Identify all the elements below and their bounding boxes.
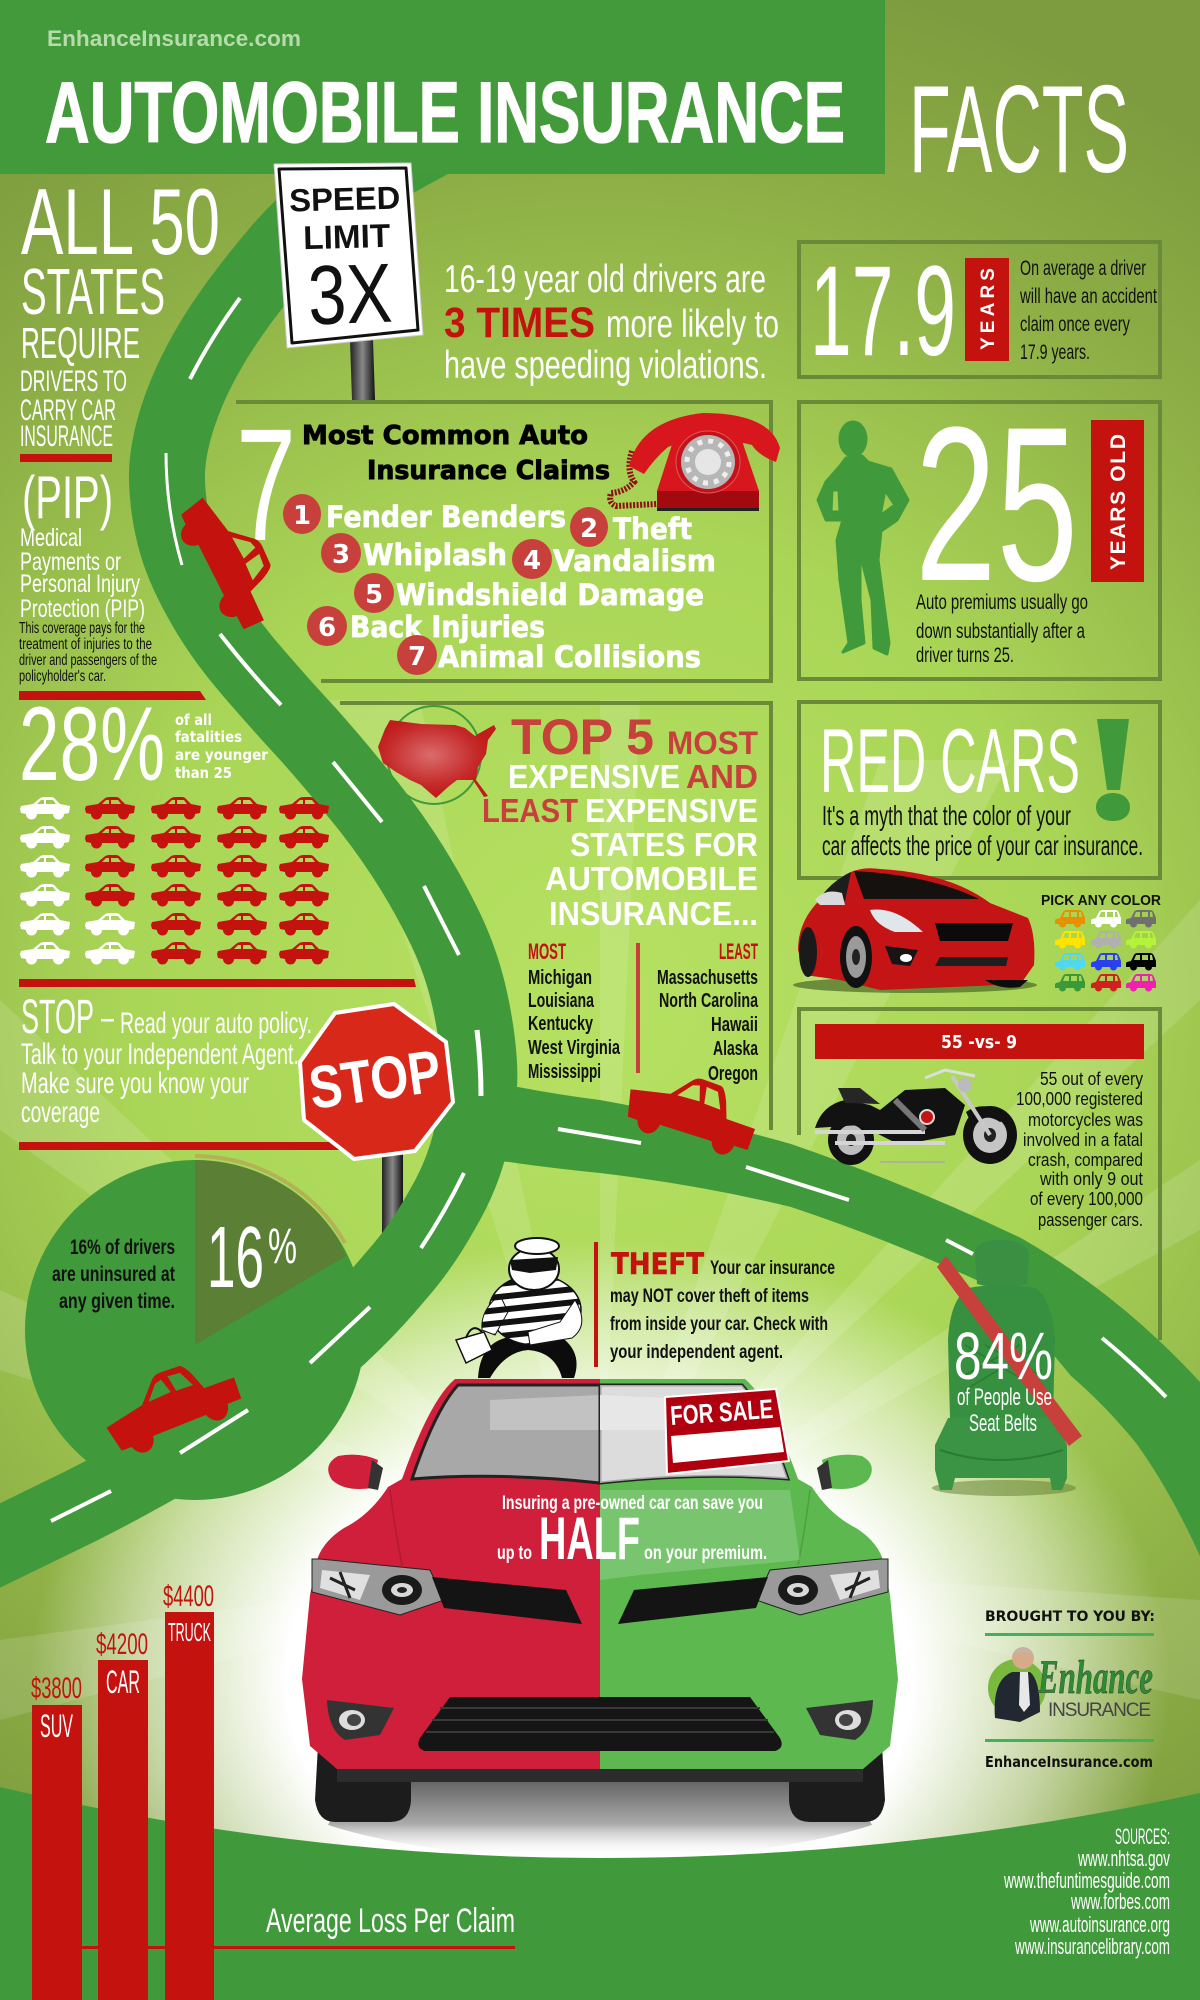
windshield highlight xyxy=(600,1385,788,1483)
logo: enhance insurance: INSURANCE xyxy=(1048,1700,1151,1721)
road: branch xyxy=(480,1087,1200,1556)
panel: stop read your policy: coverage xyxy=(21,1096,100,1129)
panel: PIP: driver and passengers of the xyxy=(19,652,157,669)
panel: 25 years old: down substantially after a xyxy=(916,620,1085,643)
panel: top 5 states: EXPENSIVE xyxy=(585,792,758,829)
panel: 7 most common claims: 7 xyxy=(236,395,296,574)
panel: stop read your policy: Talk to your Independent Agent. xyxy=(21,1038,299,1071)
claim 3 xyxy=(321,533,507,573)
divider bar xyxy=(19,979,416,987)
divider bar xyxy=(19,1142,344,1150)
claim 1: 1 xyxy=(293,501,311,531)
panel: 28 percent fatalities: of all xyxy=(175,711,212,729)
panel: PIP: This coverage pays for the xyxy=(19,620,145,637)
panel: 55 vs 9: involved in a fatal xyxy=(1023,1130,1143,1150)
panel: 55 vs 9: 55 -vs- 9 xyxy=(941,1032,1017,1053)
list: most expensive: Louisiana xyxy=(528,990,595,1012)
panel: theft text xyxy=(610,1247,835,1363)
panel: PIP: Personal Injury xyxy=(20,570,140,598)
pre-owned car text xyxy=(497,1493,767,1572)
icon: speed limit sign: SPEED xyxy=(289,180,401,218)
panel: 55 vs 9: with only 9 out xyxy=(1039,1169,1143,1189)
bar: truck: TRUCK xyxy=(168,1617,211,1647)
big car: left red half xyxy=(302,1379,600,1822)
claim 6: 6 xyxy=(318,613,336,643)
panel: 17.9 years: 17.9 years. xyxy=(1020,341,1090,364)
icon: exclamation mark xyxy=(1096,719,1130,821)
header band xyxy=(0,0,885,174)
panel: 25 years old: Auto premiums usually go xyxy=(916,591,1088,614)
bar: suv xyxy=(31,1672,82,2000)
icon: person silhouette xyxy=(818,422,908,654)
sources xyxy=(1003,1824,1170,1959)
list: least expensive: Hawaii xyxy=(711,1014,758,1036)
speeding text: 3 TIMES xyxy=(444,299,595,347)
speeding text: more likely to xyxy=(606,303,779,346)
claim 5: 5 xyxy=(365,580,383,610)
icon: speed limit sign post xyxy=(350,340,375,400)
panel: all 50 states: STATES xyxy=(21,255,165,328)
panel: 7 most common claims: Most Common Auto xyxy=(302,421,588,451)
panel: PIP: Medical xyxy=(20,524,82,552)
claim 7: 7 xyxy=(408,642,426,672)
panel: PIP: Payments or xyxy=(20,548,121,576)
bar: car xyxy=(96,1628,148,2000)
panel: brought to you by xyxy=(985,1609,1155,1771)
panel: 17.9 years: claim once every xyxy=(1020,313,1130,336)
divider bar xyxy=(20,454,112,462)
pie wedge xyxy=(195,1160,346,1345)
list: most expensive xyxy=(528,939,621,1083)
panel: PIP: (PIP) xyxy=(22,464,113,531)
bar: suv: $3800 xyxy=(31,1672,82,1705)
claim 6: Back Injuries xyxy=(350,610,545,644)
panel: all 50 states: CARRY CAR xyxy=(20,394,116,427)
panel: theft text: Your car insurance xyxy=(710,1258,835,1279)
chart title: Average Loss Per Claim xyxy=(266,1902,515,1940)
panel: top 5 states: MOST xyxy=(667,725,758,761)
bar chart: average loss per claim xyxy=(31,1580,214,2000)
claim 4 xyxy=(512,539,716,579)
panel: top 5 states xyxy=(378,706,759,1085)
panel: theft text: from inside your car. Check with xyxy=(610,1314,828,1335)
stop sign post xyxy=(382,1150,403,1240)
speeding text: 16-19 year old drivers are xyxy=(444,258,766,301)
panel: brought to you by: BROUGHT TO YOU BY: xyxy=(985,1609,1155,1625)
theft accent line xyxy=(594,1242,598,1367)
icon: red car on lower road xyxy=(95,1344,248,1468)
claim 2: Theft xyxy=(613,512,692,546)
pie chart: 16 percent uninsured xyxy=(25,1160,365,1500)
panel: stop read your policy: Make sure you know your xyxy=(21,1067,249,1100)
big car: right green half xyxy=(600,1379,898,1822)
panel: PIP: treatment of injuries to the xyxy=(19,636,152,653)
panel: 25 years old: driver turns 25. xyxy=(916,644,1014,667)
list: least expensive: LEAST xyxy=(719,939,758,964)
seat belt text: 84% xyxy=(954,1319,1053,1394)
panel: PIP: policyholder's car. xyxy=(19,668,106,685)
claim 2: 2 xyxy=(580,514,598,544)
site name: EnhanceInsurance.com xyxy=(47,26,301,51)
divider bar xyxy=(19,691,206,700)
panel: 25 years old xyxy=(818,381,1144,667)
bar: truck xyxy=(163,1580,214,2000)
list: most expensive: MOST xyxy=(528,939,566,964)
panel: pie text: 16 xyxy=(207,1209,264,1306)
panel: all 50 states: ALL 50 xyxy=(21,169,220,274)
panel: top 5 states: AND xyxy=(686,758,758,795)
panel: frame lines xyxy=(236,242,1160,1340)
icon: red sports car xyxy=(793,868,1037,993)
panel: pie text: any given time. xyxy=(59,1290,175,1313)
background rays xyxy=(0,700,1200,1720)
pictogram: red cars xyxy=(85,797,329,964)
claim 1 xyxy=(283,494,566,534)
speeding text xyxy=(444,258,779,387)
list: least expensive: Massachusetts xyxy=(657,967,758,989)
panel: stop read your policy xyxy=(21,991,312,1129)
bar: suv: SUV xyxy=(40,1708,73,1744)
list: least expensive: North Carolina xyxy=(659,990,759,1012)
pick any color: PICK ANY COLOR xyxy=(1041,892,1161,909)
road dashes xyxy=(51,298,1166,1521)
panel: 55 vs 9: crash, compared xyxy=(1028,1150,1143,1170)
list: least expensive: Alaska xyxy=(713,1038,759,1060)
road: main xyxy=(0,120,479,1565)
list: least expensive: Oregon xyxy=(708,1063,758,1085)
icon: red car on road upper xyxy=(165,484,296,637)
seat belt text: Seat Belts xyxy=(969,1410,1037,1437)
list: most expensive: West Virginia xyxy=(528,1037,621,1059)
icon: speed limit sign: LIMIT xyxy=(303,217,391,256)
icon: red car on branch road xyxy=(621,1065,763,1160)
list: least expensive xyxy=(657,939,759,1085)
claim 3: Whiplash xyxy=(363,538,507,572)
seat belt text: of People Use xyxy=(957,1384,1052,1411)
claim 1: Fender Benders xyxy=(326,500,566,534)
pre-owned car text: on your premium. xyxy=(644,1543,767,1564)
claim 2 xyxy=(570,507,692,547)
pictogram: white cars xyxy=(20,797,135,964)
panel: brought to you by: EnhanceInsurance.com xyxy=(985,1753,1153,1771)
panel: pie text: 16% of drivers xyxy=(70,1236,175,1259)
panel: theft text: THEFT xyxy=(611,1247,704,1281)
panel: 55 vs 9: motorcycles was xyxy=(1028,1110,1143,1130)
bar: car: $4200 xyxy=(96,1628,148,1661)
claim 3: 3 xyxy=(332,540,350,570)
panel: top 5 states: AUTOMOBILE xyxy=(545,860,758,897)
icon: red telephone xyxy=(610,413,780,511)
panel: 7 most common claims: Insurance Claims xyxy=(367,456,610,486)
panel: top 5 states: TOP 5 xyxy=(511,709,654,765)
seat belt text xyxy=(954,1319,1053,1437)
panel: 55 vs 9 xyxy=(815,1024,1144,1230)
panel: red cars xyxy=(820,711,1143,861)
claim 6 xyxy=(307,606,545,646)
icon: motorcycle xyxy=(815,1070,1017,1165)
title: AUTOMOBILE INSURANCE xyxy=(45,65,845,161)
bar: truck: $4400 xyxy=(163,1580,214,1613)
icon: speed limit sign: 3X xyxy=(306,246,394,342)
panel: 7 most common claims xyxy=(236,395,780,675)
panel: top 5 states: STATES FOR xyxy=(570,826,758,863)
panel: 25 years old: 25 xyxy=(915,381,1078,627)
bottom green band xyxy=(0,1787,1200,2000)
list: most expensive: Kentucky xyxy=(528,1013,594,1035)
pre-owned car text: up to xyxy=(497,1543,532,1564)
list: most expensive: Mississippi xyxy=(528,1061,601,1083)
panel: pie text: are uninsured at xyxy=(52,1263,175,1286)
claim 4: Vandalism xyxy=(553,544,716,578)
color swatch cars xyxy=(1055,910,1156,992)
panel: all 50 states xyxy=(20,169,220,453)
panel: 28 percent fatalities: 28% xyxy=(19,686,165,803)
illustration: thief xyxy=(456,1238,582,1378)
panel: 55 vs 9: of every 100,000 xyxy=(1030,1189,1143,1209)
panel: theft text: your independent agent. xyxy=(610,1342,783,1363)
panel: 25 years old: YEARS OLD xyxy=(1107,434,1130,570)
panel: 55 vs 9: passenger cars. xyxy=(1038,1210,1143,1230)
panel: pie text xyxy=(52,1209,297,1313)
big car shadow xyxy=(328,1782,872,1858)
chart baseline xyxy=(82,1946,515,1949)
icon: speed limit sign xyxy=(274,163,423,348)
white glow behind big car xyxy=(30,1240,1170,2000)
bar: car: CAR xyxy=(106,1664,140,1700)
panel: top 5 states: EXPENSIVE xyxy=(508,758,680,795)
panel: PIP: Protection (PIP) xyxy=(20,595,145,623)
panel: top 5 states: INSURANCE... xyxy=(549,895,758,932)
panel: stop read your policy: Read your auto policy. xyxy=(120,1007,312,1040)
panel: 28 percent fatalities: are younger xyxy=(175,746,269,764)
panel: 28 percent fatalities: than 25 xyxy=(175,764,232,782)
speeding text: have speeding violations. xyxy=(444,344,767,387)
panel: pie text: % xyxy=(268,1218,297,1274)
panel: stop read your policy: STOP xyxy=(21,991,94,1044)
hood highlight xyxy=(600,1490,800,1580)
panel: 17.9 years: YEARS xyxy=(978,268,999,350)
for sale sign: FOR SALE xyxy=(669,1394,774,1431)
arc accent xyxy=(195,1156,345,1243)
panel: all 50 states: DRIVERS TO xyxy=(20,365,127,398)
icon: stop sign xyxy=(300,1004,453,1159)
claim 4: 4 xyxy=(523,546,541,576)
panel: all 50 states: INSURANCE xyxy=(20,420,113,453)
pre-owned car text: HALF xyxy=(539,1505,640,1572)
pre-owned car text: Insuring a pre-owned car can save you xyxy=(502,1493,763,1514)
panel: 28 percent fatalities: fatalities xyxy=(175,728,242,746)
panel: 17.9 years: 17.9 xyxy=(810,240,956,383)
claim 7: Animal Collisions xyxy=(438,640,701,674)
claim 5: Windshield Damage xyxy=(396,578,704,612)
panel: PIP xyxy=(19,464,157,685)
logo: enhance insurance xyxy=(988,1647,1153,1722)
icon: stop sign: STOP xyxy=(305,1037,445,1122)
list: most expensive: Michigan xyxy=(528,967,592,989)
icon: usa map xyxy=(378,706,496,804)
for sale sign xyxy=(665,1389,789,1474)
panel: 55 vs 9: 100,000 registered xyxy=(1016,1089,1143,1109)
panel: top 5 states: LEAST xyxy=(482,792,578,829)
icon: car seat xyxy=(932,1240,1082,1496)
panel: 55 vs 9: 55 out of every xyxy=(1040,1069,1143,1089)
panel: all 50 states: REQUIRE xyxy=(21,319,140,368)
panel: theft text: may NOT cover theft of items xyxy=(610,1286,809,1307)
